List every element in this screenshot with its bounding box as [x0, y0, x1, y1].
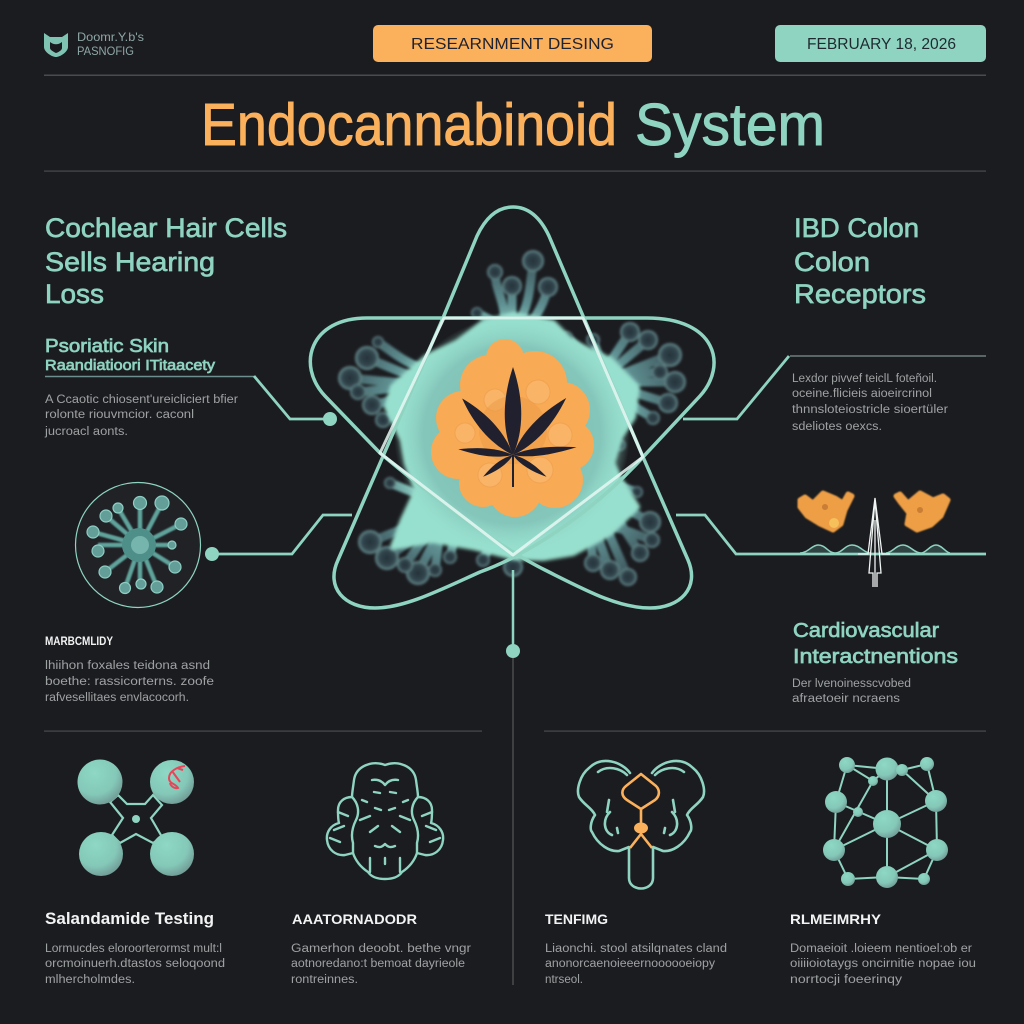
- text block: left middle: rafvesellitaes envlacocorh.: [45, 692, 189, 704]
- badge: date: [775, 25, 986, 62]
- icon: molecule spheres: [78, 760, 194, 876]
- text block: aaatornadodr: [291, 911, 471, 986]
- left heading: Sells Hearing: [45, 247, 215, 277]
- icon: brain outline: [327, 763, 443, 879]
- text block: tenfimg: TENFIMG: [545, 911, 608, 927]
- text block: tenfimg: [545, 911, 727, 986]
- text block: tenfimg: anonorcaenoieeernoooooeiopy: [545, 958, 715, 970]
- right heading: Colon: [794, 247, 870, 277]
- text block: colon: thnnsloteiostricle sioertüler: [792, 404, 948, 416]
- icon: cannabis leaf: [457, 367, 577, 487]
- text block: aaatornadodr: aotnoredano:t bemoat dayrieole: [291, 958, 465, 970]
- right heading: Receptors: [794, 279, 926, 309]
- central diagram: [310, 207, 714, 608]
- text block: rlmeimrhy: RLMEIMRHY: [790, 911, 882, 927]
- left heading: Loss: [45, 279, 104, 309]
- title: System: [635, 92, 825, 158]
- text block: rlmeimrhy: oiiiioiotaygs oncirnitie nopae iou: [790, 958, 976, 970]
- text block: rlmeimrhy: Domaeioit .loieem nentioel:ob er: [790, 943, 972, 955]
- connector: psoriatic skin: [45, 376, 337, 426]
- text block: salandamide testing: Lormucdes eloroorterormst mult:l: [45, 943, 222, 955]
- text block: colon: oceine.flicieis aioeircrinol: [792, 388, 932, 400]
- text block: psoriatic skin: Raandiatioori ITitaacety: [45, 357, 216, 374]
- header: [44, 25, 986, 62]
- logo text: [77, 30, 144, 58]
- orange flower: [431, 339, 594, 517]
- text block: cardiovascular: Interactnentions: [793, 646, 958, 668]
- connector: colon: [683, 356, 986, 419]
- badge: date: FEBRUARY 18, 2026: [807, 36, 956, 53]
- text block: tenfimg: Liaonchi. stool atsilqnates cland: [545, 943, 727, 955]
- teal body: [387, 315, 637, 558]
- icon: virus cell: [76, 482, 200, 608]
- text block: salandamide testing: mlhercholmdes.: [45, 974, 135, 986]
- text block: tenfimg: ntrseol.: [545, 974, 583, 986]
- text block: cardiovascular: Der lvenoinesscvobed: [792, 678, 911, 690]
- star inner highlights: [380, 318, 643, 555]
- title: Endocannabinoid: [201, 92, 617, 158]
- right heading: IBD Colon: [794, 213, 919, 243]
- text block: psoriatic skin: [44, 336, 238, 438]
- icon: molecular network: [823, 757, 948, 888]
- text block: colon: Lexdor pivvef teiclL foteñoil.: [792, 373, 937, 385]
- tendrils: [338, 250, 686, 586]
- icon: brainstem: [578, 761, 704, 888]
- right heading: [794, 213, 926, 309]
- text block: psoriatic skin: A Ccaotic chiosent'ureicliciert bfier: [45, 394, 238, 406]
- text block: salandamide testing: Salandamide Testing: [45, 909, 214, 928]
- text block: aaatornadodr: Gamerhon deoobt. bethe vngr: [291, 943, 471, 955]
- text block: aaatornadodr: rontreinnes.: [291, 974, 358, 986]
- left heading: Cochlear Hair Cells: [45, 213, 287, 243]
- text block: cardiovascular: afraetoeir ncraens: [792, 693, 900, 705]
- connector: virus: [205, 515, 352, 561]
- icon: orange receptors: [800, 493, 948, 530]
- text block: psoriatic skin: jucroacl aonts.: [44, 426, 128, 438]
- text block: aaatornadodr: AAATORNADODR: [292, 911, 417, 927]
- logo text: Doomr.Y.b's: [77, 30, 144, 44]
- badge: research: RESEARNMENT DESING: [411, 36, 614, 53]
- text block: cardiovascular: Cardiovascular: [793, 620, 939, 642]
- text block: colon: sdeliotes oexcs.: [792, 421, 882, 433]
- text block: cardiovascular: [792, 620, 958, 705]
- text block: psoriatic skin: rolonte riouvmcior. caconl: [45, 409, 194, 421]
- text block: left middle: [45, 634, 214, 704]
- text block: rlmeimrhy: [790, 911, 976, 986]
- badge: research: [373, 25, 652, 62]
- logo text: PASNOFIG: [77, 44, 134, 58]
- connector and heartbeat chart: [676, 498, 986, 587]
- text block: salandamide testing: [45, 909, 225, 986]
- text block: rlmeimrhy: norrtocji foeerinqy: [790, 974, 902, 986]
- icon: logo shield: [44, 33, 68, 57]
- star outline: [310, 207, 714, 608]
- text block: left middle: MARBCMLIDY: [45, 634, 113, 648]
- text block: salandamide testing: orcmoinuerh.dtastos seloqoond: [45, 958, 225, 970]
- text block: psoriatic skin: Psoriatic Skin: [45, 336, 169, 356]
- text block: colon: [792, 373, 948, 433]
- text block: left middle: lhiihon foxales teidona asnd: [45, 660, 210, 672]
- connector: bottom stem: [506, 570, 520, 985]
- left heading: [45, 213, 287, 309]
- text block: left middle: boethe: rassicorterns. zoofe: [45, 676, 214, 688]
